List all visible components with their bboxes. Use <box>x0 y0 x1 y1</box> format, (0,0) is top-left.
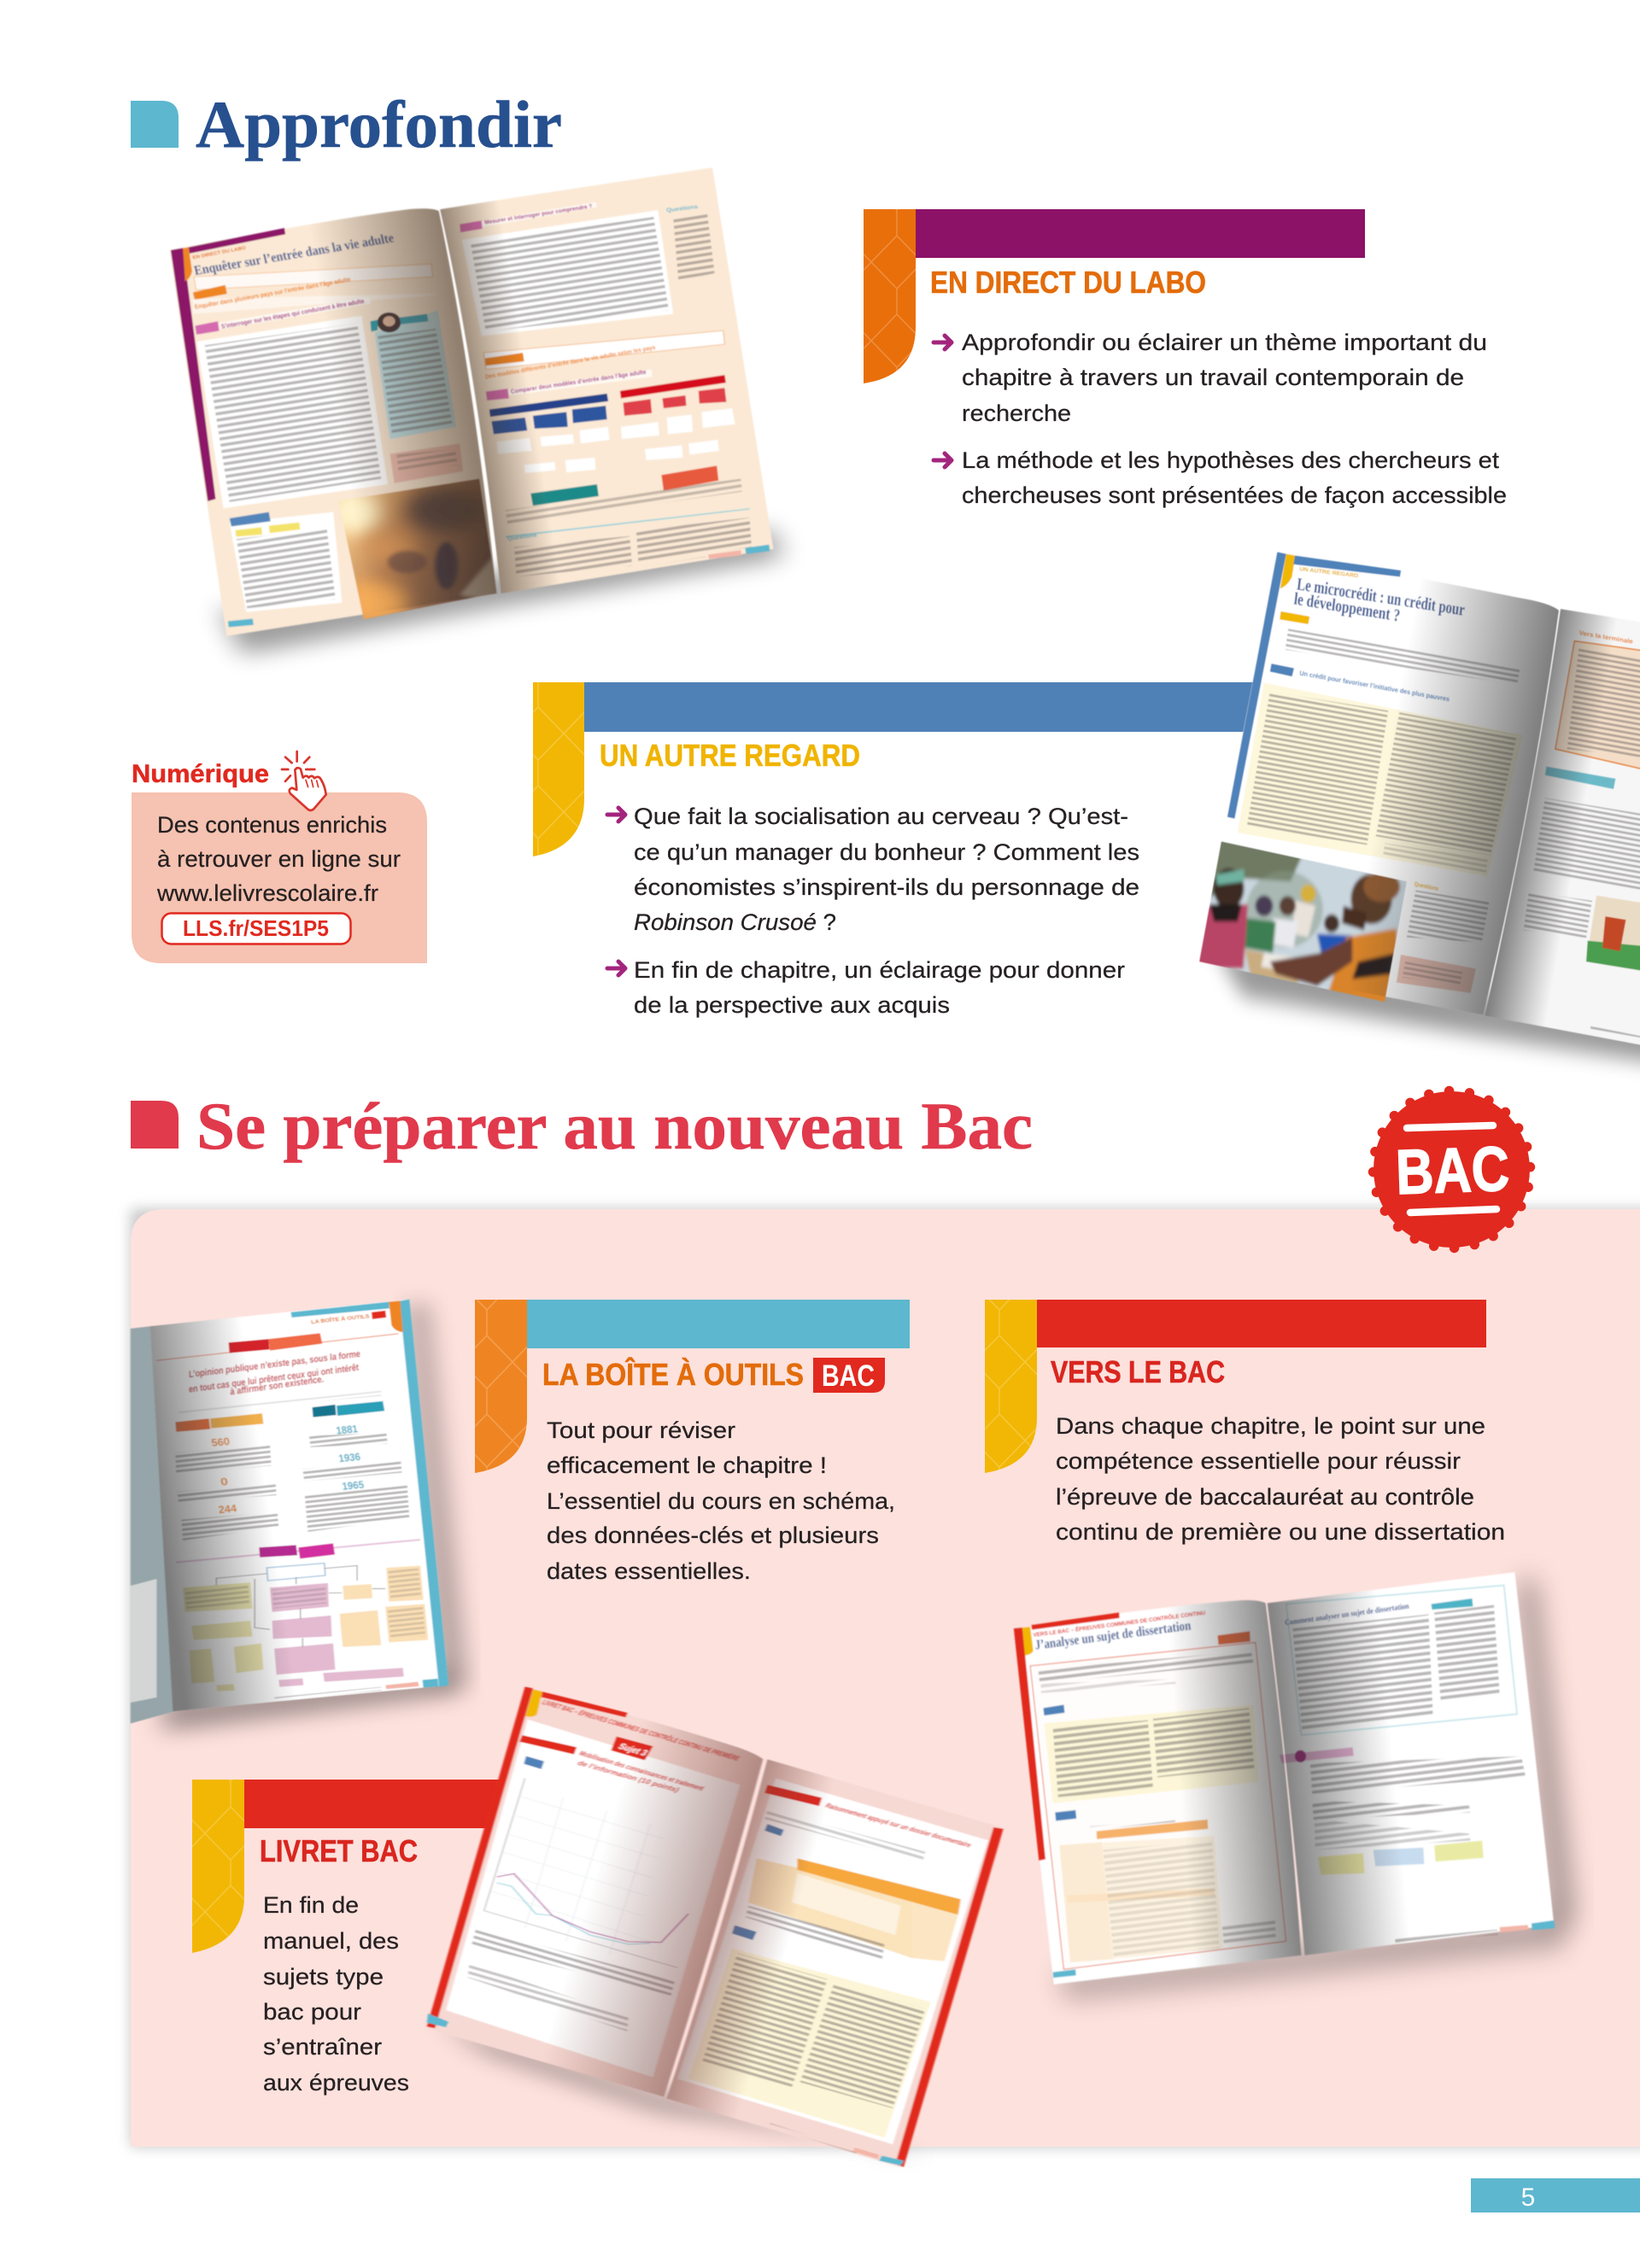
book spread: En direct du labo: Enquêter sur l’entrée dans la vie adulte <box>192 231 395 278</box>
spine shading <box>150 1300 448 1711</box>
heading: LIVRET BAC <box>260 1833 418 1868</box>
description: En fin de <box>263 1892 359 1918</box>
bullet text 1: chapitre à travers un travail contemporain de <box>962 365 1464 390</box>
right page <box>1268 1572 1554 1955</box>
description: efficacement le chapitre ! <box>547 1453 827 1478</box>
arrow <box>934 336 952 349</box>
description <box>547 1418 895 1584</box>
panel: Se préparer au nouveau Bac background <box>131 1209 1640 2147</box>
bullet text 1 <box>962 330 1487 426</box>
description: continu de première ou une dissertation <box>1056 1519 1505 1545</box>
book page: La boîte à outils: 1881 <box>335 1423 359 1436</box>
book spread: Un autre regard <box>1187 552 1640 1067</box>
badge: BAC: BAC <box>1395 1133 1510 1207</box>
book spread: Vers le bac: J’analyse un sujet de dissertation <box>1034 1618 1192 1653</box>
book spread: Un autre regard: Le microcrédit : un crédit pour <box>1296 575 1466 620</box>
book page: La boîte à outils: 0 <box>220 1475 229 1488</box>
book spread: Livret bac: LIVRET BAC – ÉPREUVES COMMUNES DE CONTRÔLE CONTINU DE PREMIÈRE <box>540 1698 741 1762</box>
icon: clicking hand <box>282 751 326 810</box>
bullet text 1: économistes s’inspirent-ils du personnage de <box>634 874 1139 900</box>
book spread: En direct du labo: Mesurer et interroger pour comprendre ? <box>484 203 593 225</box>
book spread: En direct du labo: Enquêter dans plusieurs pays sur l’entrée dans l’âge adulte <box>194 276 352 311</box>
bullet text 2: de la perspective aux acquis <box>634 992 950 1018</box>
book spread: Un autre regard: Un crédit pour favoriser l’initiative des plus pauvres <box>1299 669 1450 703</box>
left page <box>427 1686 763 2097</box>
description: des données-clés et plusieurs <box>547 1523 879 1548</box>
bullet text 1: Robinson Crusoé ? <box>634 909 836 935</box>
book page: La boîte à outils: 560 <box>210 1435 231 1449</box>
book page: La boîte à outils: LA BOÎTE À OUTILS <box>310 1312 370 1325</box>
heading: UN AUTRE REGARD <box>600 738 860 773</box>
box text: www.lelivrescolaire.fr <box>156 880 378 906</box>
description: l’épreuve de baccalauréat au contrôle <box>1056 1484 1474 1510</box>
book spread: En direct du labo: Comparer deux modèles d’entrée dans l’âge adulte <box>510 368 647 395</box>
bullet text 2: chercheuses sont présentées de façon accessible <box>962 482 1507 508</box>
book page: La boîte à outils: 1965 <box>341 1478 365 1493</box>
book spread: Un autre regard: UN AUTRE REGARD <box>1299 567 1359 580</box>
book spread: En direct du labo: EN DIRECT DU LABO <box>192 245 247 260</box>
description: sujets type <box>263 1964 384 1990</box>
badge: BAC <box>1374 1091 1531 1248</box>
heading: VERS LE BAC <box>1051 1354 1225 1389</box>
bullet text 1: ce qu’un manager du bonheur ? Comment les <box>634 839 1139 865</box>
photo: street at sunset <box>338 478 497 620</box>
box <box>132 792 427 963</box>
description: dates essentielles. <box>547 1558 751 1584</box>
book page: La boîte à outils: 1936 <box>337 1450 361 1464</box>
description: bac pour <box>263 1999 361 2025</box>
tab and colour band <box>864 209 1365 383</box>
box text: à retrouver en ligne sur <box>157 846 401 872</box>
book spread: En direct du labo: Des modèles différents d’entrée dans la vie adulte selon les pays <box>484 343 656 380</box>
description: Tout pour réviser <box>547 1418 735 1443</box>
description: compétence essentielle pour réussir <box>1056 1448 1461 1474</box>
quote: à affirmer son existence. <box>229 1374 325 1397</box>
feature block: Un autre regard <box>533 682 1281 1018</box>
spine shading <box>1014 1600 1301 1984</box>
tab and colour band <box>533 682 1281 856</box>
book page: La boîte à outils: 244 <box>218 1502 237 1516</box>
concept map <box>183 1564 428 1691</box>
right page <box>440 167 774 593</box>
description <box>263 1892 409 2096</box>
bullet text 1 <box>634 804 1139 935</box>
tag: BAC: BAC <box>822 1359 875 1393</box>
left page <box>1014 1600 1301 1984</box>
link pill: LLS.fr/SES1P5 <box>183 915 329 941</box>
book spread: Vers le bac: Comment analyser un sujet de dissertation <box>1285 1601 1409 1627</box>
quote <box>188 1348 361 1397</box>
bullet text 2 <box>634 957 1125 1018</box>
tab and colour band <box>192 1780 526 1953</box>
left page <box>170 208 497 636</box>
photo: women around a table <box>1199 841 1407 1002</box>
book spread: Livret bac: de l’information (10 points) <box>576 1759 681 1794</box>
label: Numérique <box>132 760 269 788</box>
bullet text 1: recherche <box>962 400 1071 426</box>
book spread: En direct du labo: Questions <box>666 203 699 213</box>
book spread: Livret bac: Mobilisation des connaissances et traitement <box>577 1750 706 1792</box>
feature block: La boîte à outils <box>475 1300 910 1584</box>
right page <box>1485 609 1640 1049</box>
cream text box <box>688 1948 931 2137</box>
tab and colour band <box>985 1300 1486 1473</box>
box text: Des contenus enrichis <box>157 812 387 838</box>
bullet text 2: La méthode et les hypothèses des chercheurs et <box>962 447 1500 473</box>
panel shadow <box>131 1209 1640 2147</box>
book spread: Livret bac: Sujet 3 <box>616 1741 650 1758</box>
tab and colour band <box>475 1300 910 1473</box>
left page edge <box>131 1326 174 1723</box>
book spread: Livret bac <box>427 1686 1004 2167</box>
box text <box>156 812 401 906</box>
feature block: Livret bac <box>192 1780 526 2096</box>
book spread: En direct du labo: S’interroger sur les étapes qui conduisent à être adulte <box>220 297 366 330</box>
bullet text 2 <box>962 447 1507 508</box>
book spread: Un autre regard: le développement ? <box>1293 589 1401 626</box>
quote: en tout cas que lui prêtent ceux qui ont intérêt <box>188 1362 360 1394</box>
bullet text 1: Que fait la socialisation au cerveau ? Qu’est- <box>634 804 1128 829</box>
description: Dans chaque chapitre, le point sur une <box>1056 1413 1485 1439</box>
description: manuel, des <box>263 1928 399 1954</box>
book spread: Livret bac: Raisonnement appuyé sur un dossier documentaire <box>823 1802 973 1850</box>
arrow <box>607 962 625 975</box>
callout: Numérique <box>132 751 427 963</box>
feature block: En direct du labo <box>864 209 1507 508</box>
arrow <box>934 453 952 467</box>
book spread: Un autre regard: Questions <box>1414 881 1439 892</box>
page number: 5 <box>1521 2183 1535 2212</box>
quote: L’opinion publique n’existe pas, sous la forme <box>188 1348 361 1380</box>
page number <box>1471 2178 1640 2212</box>
bullet text 1: Approfondir ou éclairer un thème important du <box>962 330 1487 355</box>
heading: LA BOÎTE À OUTILS <box>542 1356 804 1392</box>
left page <box>1199 552 1559 1015</box>
heading: Se préparer au nouveau Bac: Se préparer au nouveau Bac <box>196 1089 1033 1163</box>
book spread: Vers le bac <box>1014 1572 1576 1997</box>
description: aux épreuves <box>263 2070 409 2096</box>
spine shading <box>427 1686 763 2097</box>
right page boxes: Vers la terminale <box>1578 630 1633 646</box>
bullet text 2: En fin de chapitre, un éclairage pour donner <box>634 957 1125 983</box>
description <box>1056 1413 1505 1545</box>
heading: EN DIRECT DU LABO <box>930 265 1206 300</box>
book spread: Vers le bac: VERS LE BAC – ÉPREUVES COMMUNES DE CONTRÔLE CONTINU <box>1033 1608 1206 1639</box>
feature block: Vers le bac <box>985 1300 1505 1545</box>
heading: Approfondir: Approfondir <box>196 87 562 161</box>
book page: La boîte à outils <box>131 1300 464 1733</box>
spine shading <box>170 208 497 636</box>
link pill <box>162 914 350 944</box>
arrow <box>607 808 625 821</box>
book spread: En direct du labo: Questions <box>507 533 537 542</box>
description: s’entraîner <box>263 2034 382 2060</box>
right page <box>666 1759 1002 2167</box>
description: L’essentiel du cours en schéma, <box>547 1488 895 1514</box>
table <box>748 1858 961 1958</box>
book spread: En direct du labo <box>170 167 782 655</box>
right page <box>150 1300 448 1711</box>
spine shading <box>1199 552 1559 1015</box>
line chart <box>484 1778 688 1967</box>
